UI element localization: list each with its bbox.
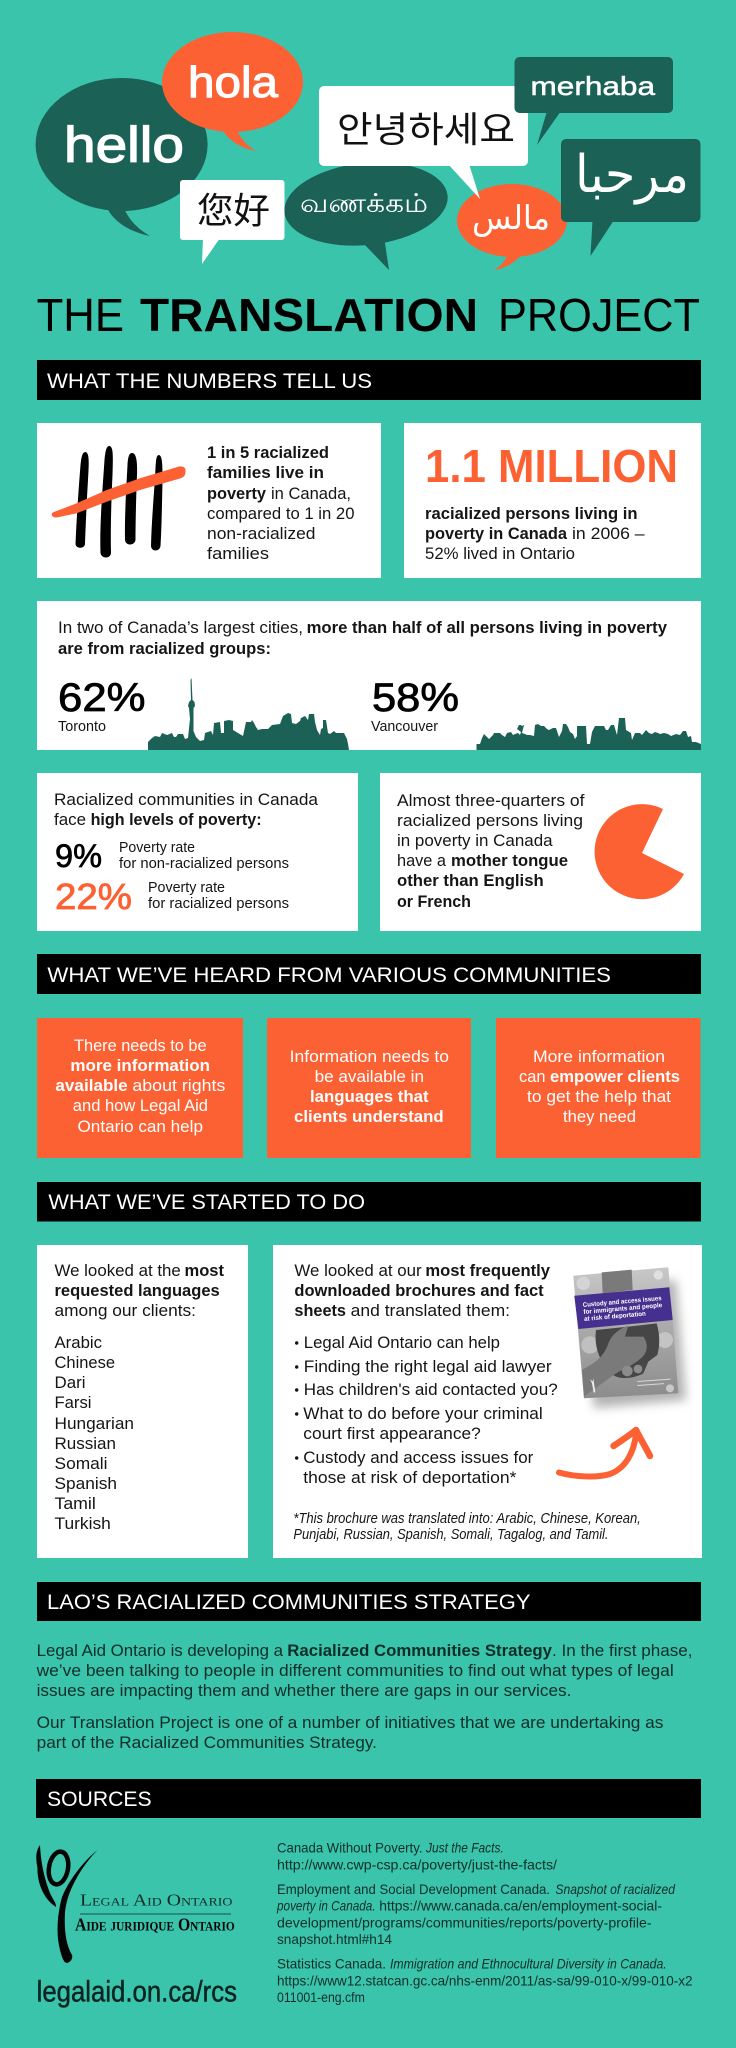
text: strategy description: . In the first phase,: [552, 1642, 692, 1660]
brochure title: at risk of deportation: [584, 1311, 646, 1323]
panel: most requested languages: [37, 1245, 248, 1558]
text: largest cities intro: are from racialized groups:: [58, 640, 271, 658]
bubble: nin hao: 您好: [197, 190, 270, 231]
panel: largest cities: [37, 601, 701, 750]
heading: what the numbers tell us: [37, 360, 701, 400]
list: languages: Russian: [54, 1435, 116, 1453]
panel: empower clients: can: [519, 1068, 546, 1086]
arrow: [559, 1430, 650, 1477]
text: largest cities intro: In two of Canada’s largest cities,: [58, 619, 303, 637]
panel: empower clients: to get the help that: [527, 1088, 671, 1106]
title: PROJECT: [498, 289, 700, 341]
list: languages: Turkish: [54, 1515, 111, 1533]
list: brochures: Finding the right legal aid lawyer: [304, 1358, 552, 1376]
panel: 1 in 5 families: [37, 423, 381, 578]
stat: Toronto 62%: [58, 676, 146, 735]
text: brochures intro: most frequently: [425, 1262, 551, 1280]
list: languages: Hungarian: [54, 1415, 134, 1433]
text: strategy description: [36, 1642, 692, 1752]
text: sources list: Canada Without Poverty.: [277, 1840, 422, 1856]
heading: what we've started to do: WHAT WE’VE STARTED TO DO: [48, 1190, 365, 1214]
icon: tally marks: [52, 446, 186, 558]
brochure title: [583, 1295, 663, 1323]
text: brochures intro: and translated them:: [351, 1302, 510, 1320]
panel: more information available: Ontario can help: [78, 1118, 203, 1136]
bubble: marhaba arabic: مرحبا: [575, 145, 689, 205]
bubble: hello: hello: [64, 117, 184, 173]
text: 1 in 5 families: in Canada,: [271, 485, 351, 503]
list: brochures: those at risk of deportation*: [303, 1469, 517, 1487]
text: 1 in 5 families: poverty: [207, 485, 267, 503]
list: languages: Somali: [54, 1455, 108, 1473]
text: strategy description: Our Translation Project is one of a number of initiatives that we are undertaking as: [37, 1714, 663, 1732]
panel: translated brochures: [273, 1245, 702, 1558]
text: sources list: 011001-eng.cfm: [277, 1989, 365, 2005]
text: languages intro: most: [184, 1262, 225, 1280]
bubble: annyeonghaseyo: 안녕하세요: [337, 109, 515, 150]
stat: Vancouver 58%: Vancouver: [371, 719, 438, 735]
list: brochures: Legal Aid Ontario can help: [304, 1334, 500, 1352]
text: mother tongue: in poverty in Canada: [397, 832, 553, 850]
bubble: marhaba arabic: [561, 139, 700, 256]
text: mother tongue: mother tongue: [451, 852, 568, 870]
bubble: nin hao: [180, 180, 284, 264]
stat: 9 percent: Poverty rate: [119, 840, 195, 856]
stat: 9 percent: [55, 838, 289, 874]
logo wordmark: Aide juridique Ontario: [75, 1915, 235, 1935]
text: high levels intro: high levels of poverty:: [91, 811, 262, 829]
text: mother tongue: racialized persons living: [397, 812, 583, 830]
panel: empower clients: More information: [533, 1048, 665, 1066]
text: 1 in 5 families: non-racialized: [207, 525, 316, 543]
list: languages: [54, 1334, 134, 1533]
logo: Legal Aid Ontario: [36, 1845, 235, 1963]
list: languages: Chinese: [54, 1354, 115, 1372]
text: strategy description: Racialized Communities Strategy: [287, 1642, 553, 1660]
panel: more information available: [37, 1018, 243, 1158]
brochure photo: [577, 1270, 674, 1397]
stat: 22 percent: 22%: [55, 876, 132, 917]
panel: languages clients understand: [267, 1018, 471, 1158]
stat: Vancouver 58%: 58%: [372, 676, 459, 720]
panel: languages clients understand: be available in: [315, 1068, 424, 1086]
list: brochures: Has children's aid contacted you?: [304, 1381, 558, 1399]
chart: three-quarters pie: [595, 804, 684, 899]
stat: Vancouver 58%: [371, 676, 459, 735]
bubble: merhaba: [514, 57, 673, 145]
list: languages: Dari: [54, 1374, 86, 1392]
footnote: Punjabi, Russian, Spanish, Somali, Tagalog, and Tamil.: [293, 1527, 608, 1543]
text: sources list: Employment and Social Development Canada.: [277, 1881, 550, 1897]
text: sources list: https://www12.statcan.gc.ca/nhs-enm/2011/as-sa/99-010-x/99-010-x2: [277, 1972, 693, 1988]
text: high levels intro: face: [54, 811, 86, 829]
text: 1 in 5 families: families live in: [207, 464, 324, 482]
text: strategy description: part of the Racialized Communities Strategy.: [37, 1734, 377, 1752]
bubble: salam: سلام: [472, 198, 550, 237]
text: persons in poverty: poverty in Canada: [425, 525, 568, 543]
brochure title: Custody and access issues: [583, 1295, 662, 1309]
bubble: merhaba: merhaba: [530, 71, 656, 101]
bubble: hola: hola: [188, 58, 279, 107]
stat: Toronto 62%: Toronto: [58, 719, 106, 735]
logo wordmark: [75, 1891, 235, 1935]
list: brochures: court first appearance?: [303, 1425, 481, 1443]
text: sources list: [276, 1840, 693, 2005]
title: [37, 289, 700, 341]
text: 1 in 5 families: families: [207, 545, 269, 563]
bubble: hola: [162, 32, 303, 151]
stat: 1.1 million: 1.1 MILLION: [425, 440, 678, 492]
text: largest cities intro: more than half of all persons living in poverty: [307, 619, 668, 637]
footnote: *This brochure was translated into: Arabic, Chinese, Korean,: [293, 1511, 641, 1527]
logo figure: [36, 1845, 98, 1963]
panel: empower clients: they need: [563, 1108, 636, 1126]
text: 1 in 5 families: compared to 1 in 20: [207, 505, 354, 523]
brochure title: for immigrants and people: [583, 1302, 663, 1316]
text: sources list: Just the Facts.: [425, 1840, 504, 1856]
text: languages intro: requested languages: [54, 1282, 220, 1300]
list: languages: Tamil: [54, 1495, 96, 1513]
text: sources list: Statistics Canada.: [277, 1956, 386, 1972]
list: brochures: [295, 1334, 558, 1487]
text: mother tongue: [397, 792, 585, 911]
stat: Toronto 62%: 62%: [58, 676, 146, 720]
text: sources list: development/programs/communities/reports/poverty-profile-: [277, 1914, 652, 1930]
text: brochures intro: downloaded brochures and fact: [294, 1282, 544, 1300]
list: languages: Arabic: [54, 1334, 102, 1352]
panel: 1.1 million: [404, 423, 701, 578]
text: sources list: https://www.canada.ca/en/employment-social-: [379, 1898, 662, 1914]
text: high levels intro: [54, 791, 319, 829]
text: largest cities intro: [58, 619, 668, 658]
text: sources list: Snapshot of racialized: [555, 1881, 676, 1897]
text: sources list: Immigration and Ethnocultural Diversity in Canada.: [390, 1956, 667, 1972]
stat: 9 percent: 9%: [55, 838, 102, 874]
text: 1 in 5 families: [207, 444, 354, 563]
text: languages intro: among our clients:: [54, 1302, 196, 1320]
text: brochures intro: We looked at our: [294, 1262, 422, 1280]
heading: LAO's racialized communities strategy: LAO’S RACIALIZED COMMUNITIES STRATEGY: [47, 1590, 530, 1614]
icon: Vancouver skyline: [476, 718, 701, 750]
icon: brochure cover: [573, 1267, 686, 1408]
text: languages intro: [54, 1262, 225, 1320]
heading: what we've heard: WHAT WE’VE HEARD FROM VARIOUS COMMUNITIES: [47, 963, 611, 987]
text: sources list: snapshot.html#h14: [277, 1931, 392, 1947]
text: mother tongue: or French: [397, 893, 471, 911]
heading: what the numbers tell us: WHAT THE NUMBERS TELL US: [47, 369, 372, 393]
list: languages: Farsi: [54, 1394, 92, 1412]
text: strategy description: Legal Aid Ontario is developing a: [37, 1642, 284, 1660]
bubble: annyeonghaseyo: [319, 86, 528, 199]
bubble: vanakkam: [280, 155, 452, 270]
stat: 9 percent: for non-racialized persons: [119, 856, 289, 872]
panel: mother tongue: [380, 773, 701, 931]
stat: 22 percent: Poverty rate: [148, 880, 225, 896]
panel: languages clients understand: Information needs to: [290, 1048, 449, 1066]
logo wordmark: Legal Aid Ontario: [80, 1891, 233, 1910]
stat: 22 percent: for racialized persons: [148, 896, 289, 912]
title: THE: [37, 289, 124, 341]
panel: empower clients: [496, 1018, 700, 1158]
panel: more information available: available: [55, 1077, 128, 1095]
panel: empower clients: empower clients: [550, 1068, 680, 1086]
text: persons in poverty: in 2006 –: [572, 525, 645, 543]
list: languages: Spanish: [54, 1475, 117, 1493]
text: persons in poverty: 52% lived in Ontario: [425, 545, 575, 563]
text: mother tongue: Almost three-quarters of: [397, 792, 585, 810]
title: TRANSLATION: [140, 289, 478, 341]
text: strategy description: we’ve been talking to people in different communities to find out what types of legal: [36, 1662, 674, 1680]
footnote: [293, 1511, 641, 1543]
website url: legalaid.on.ca/rcs: [37, 1976, 237, 2009]
bubble: hello: [36, 78, 208, 236]
panel: languages clients understand: languages that: [310, 1088, 429, 1106]
heading: what we've heard: [37, 954, 701, 994]
text: mother tongue: other than English: [397, 872, 544, 890]
text: mother tongue: have a: [397, 852, 447, 870]
panel: high levels of poverty: [37, 773, 358, 931]
panel: more information available: more information: [70, 1057, 210, 1075]
text: high levels intro: Racialized communities in Canada: [54, 791, 319, 809]
panel: more information available: and how Legal Aid: [73, 1097, 208, 1115]
text: persons in poverty: racialized persons living in: [425, 505, 638, 523]
text: persons in poverty: [425, 505, 645, 563]
heading: sources: SOURCES: [47, 1787, 152, 1811]
text: languages intro: We looked at the: [54, 1262, 181, 1280]
text: brochures intro: sheets: [294, 1302, 346, 1320]
list: brochures: Custody and access issues for: [303, 1449, 534, 1467]
bubble: salam: [457, 184, 567, 270]
speech bubbles illustration: [36, 32, 701, 270]
text: sources list: poverty in Canada.: [276, 1898, 376, 1914]
text: 1 in 5 families: 1 in 5 racialized: [207, 444, 329, 462]
heading: sources: [36, 1779, 701, 1818]
panel: more information available: about rights: [132, 1077, 225, 1095]
heading: LAO's racialized communities strategy: [37, 1582, 701, 1621]
text: strategy description: issues are impacting them and whether there are gaps in our services.: [37, 1682, 571, 1700]
icon: Toronto skyline: [148, 678, 349, 750]
stat: 22 percent: [55, 876, 289, 917]
text: sources list: http://www.cwp-csp.ca/poverty/just-the-facts/: [277, 1856, 557, 1872]
heading: what we've started to do: [37, 1182, 701, 1222]
list: brochures: What to do before your criminal: [303, 1405, 543, 1423]
panel: more information available: There needs to be: [74, 1037, 207, 1055]
panel: languages clients understand: clients understand: [294, 1108, 444, 1126]
text: brochures intro: [294, 1262, 551, 1320]
bubble: vanakkam: வணக்கம்: [300, 188, 428, 218]
